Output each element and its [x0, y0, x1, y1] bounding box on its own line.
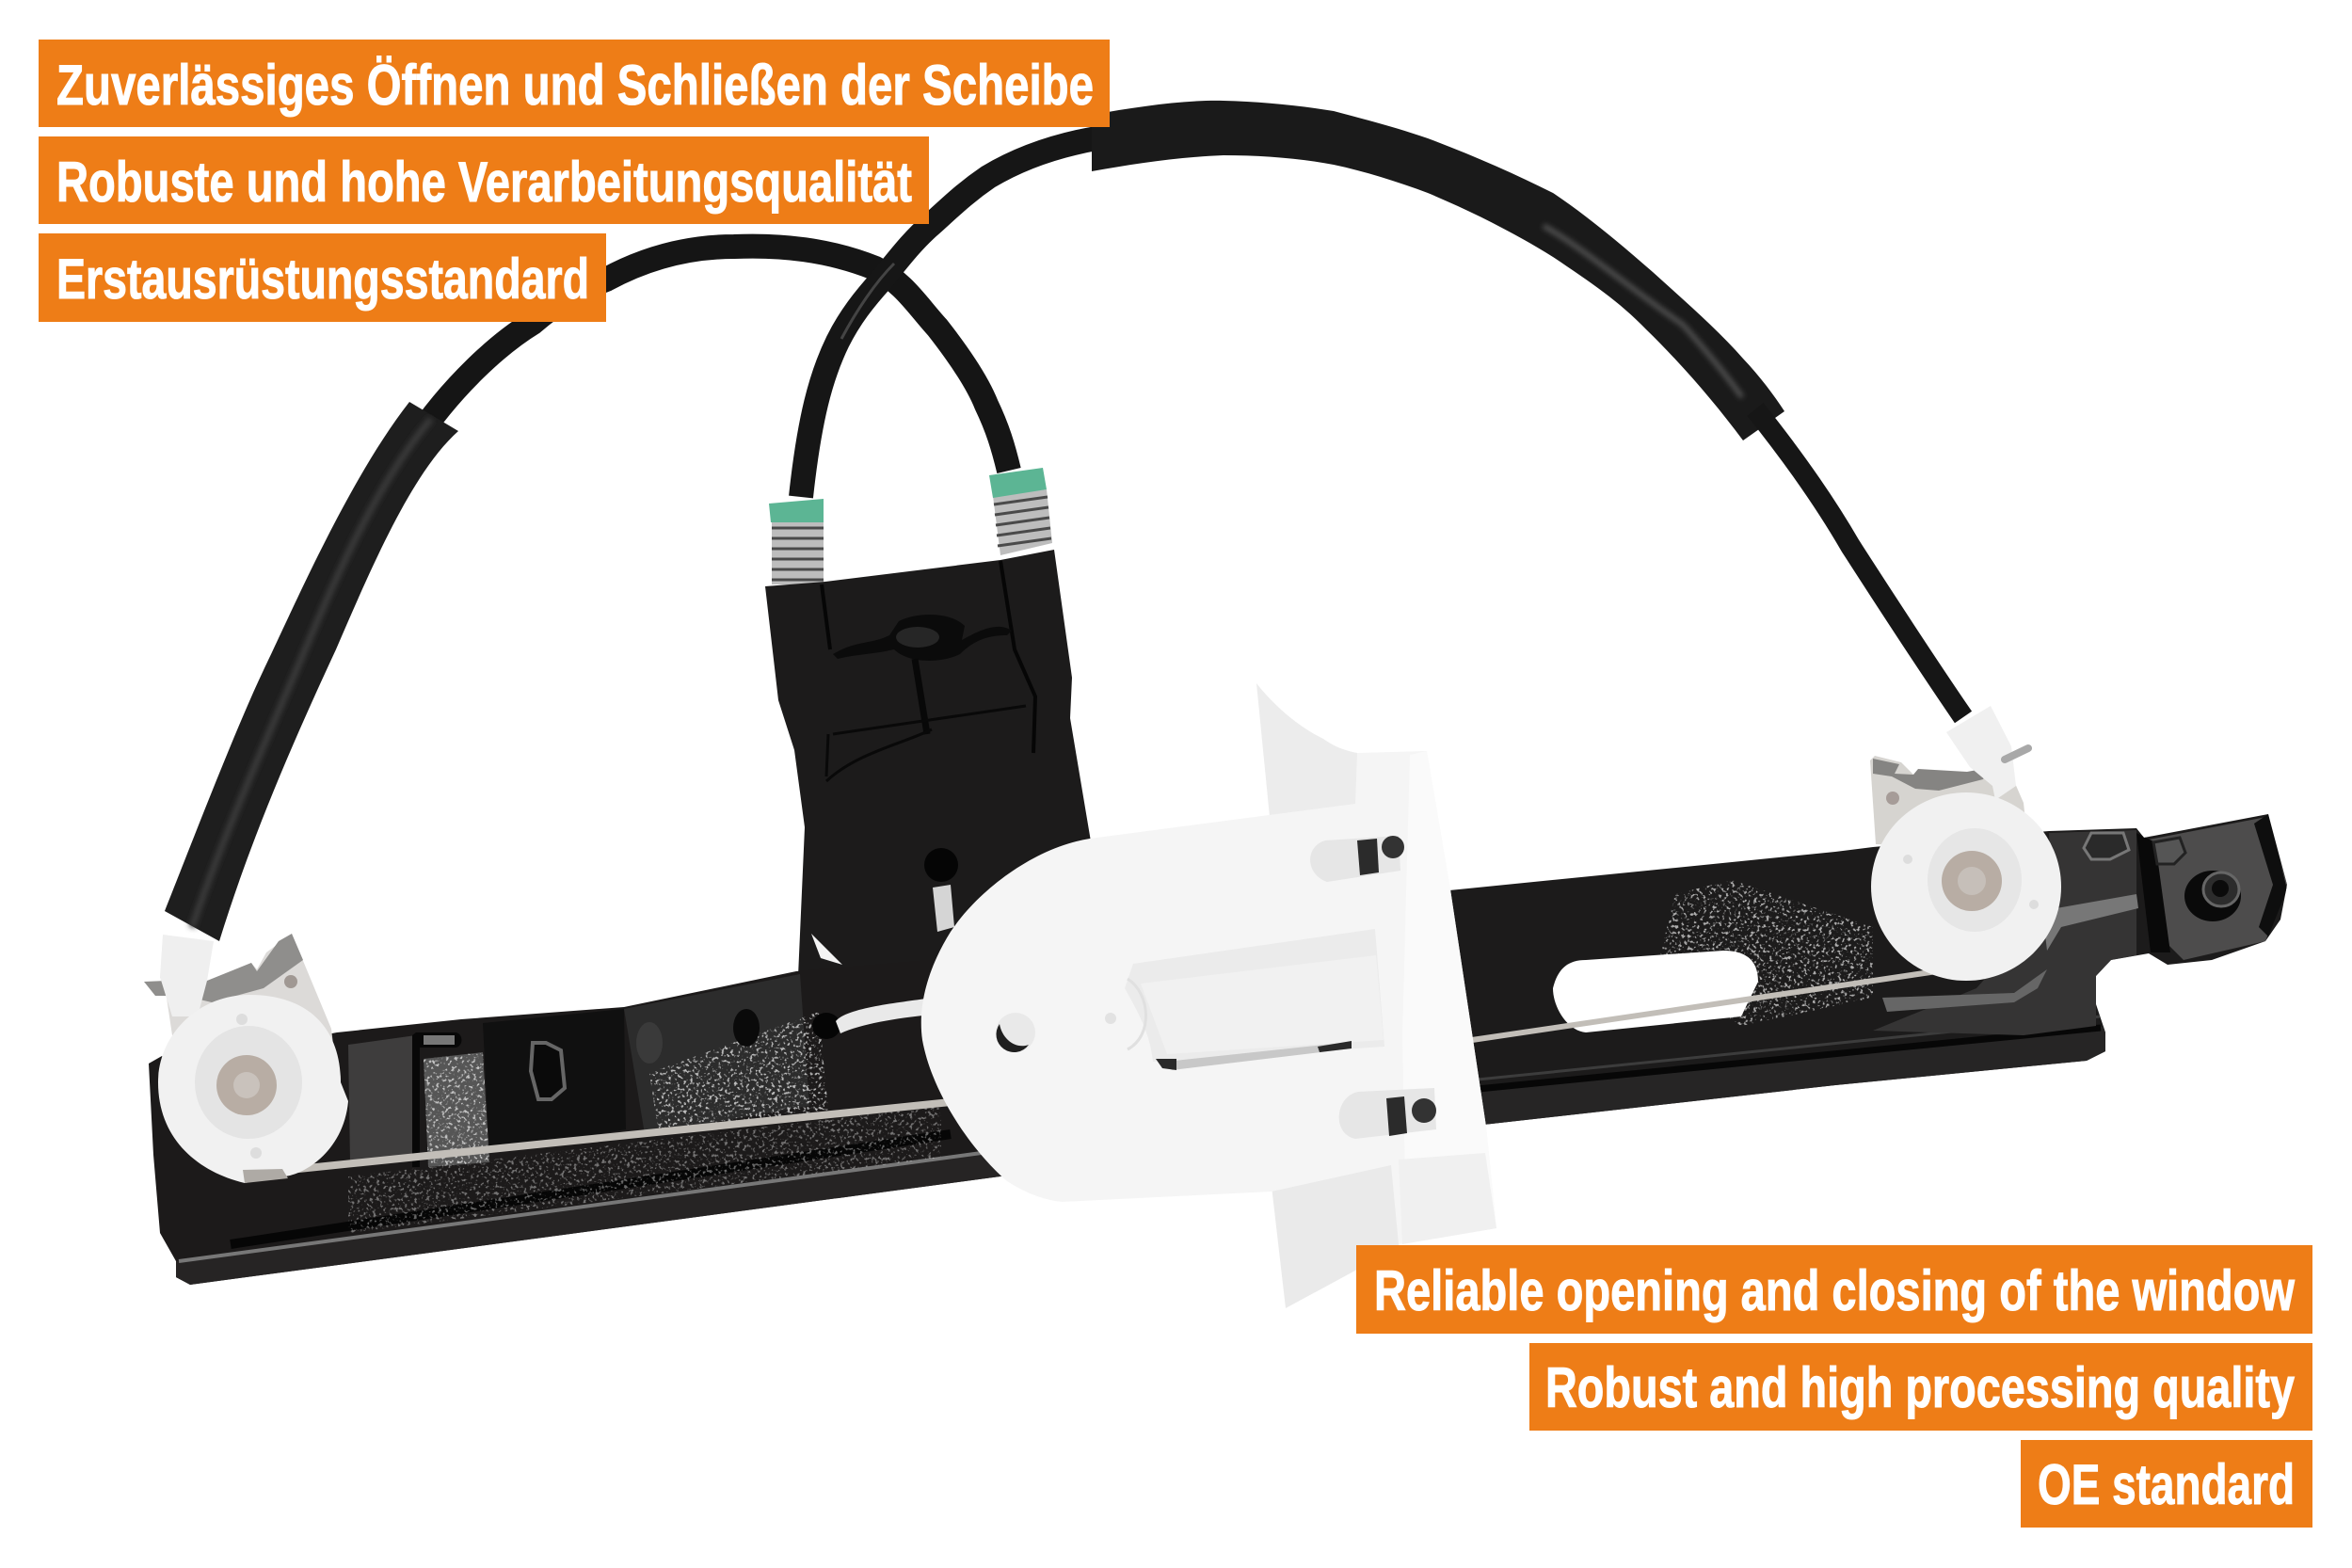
- label: OE standard (DE): Erstausrüstungsstandard: [56, 248, 589, 311]
- carrier body: [921, 751, 1496, 1244]
- label: build quality (DE): [39, 136, 929, 224]
- label: build quality (EN): [1529, 1343, 2312, 1431]
- label: reliable opening (EN): [1356, 1245, 2312, 1334]
- product photo: window regulator: [144, 101, 2287, 1308]
- right pulley: [1871, 792, 2061, 981]
- white plastic carrier: [921, 683, 1496, 1308]
- carrier hole: [996, 1013, 1035, 1052]
- label: OE standard (DE): [39, 233, 606, 322]
- English feature labels: [1356, 1245, 2312, 1528]
- left cable sleeve: [160, 935, 214, 1016]
- lower steel rail, right section: [1440, 814, 2287, 1134]
- left cable: [165, 247, 1009, 941]
- label: reliable opening (DE): [39, 40, 1110, 127]
- cable end fittings: springs: [769, 468, 1052, 584]
- right cable: [801, 101, 1963, 717]
- rail slot: [1553, 951, 1758, 1032]
- right cable sleeve: [1946, 706, 2016, 800]
- black plastic guide plate: [765, 550, 1092, 998]
- German feature labels: [39, 40, 1110, 322]
- left pulley bracket: [144, 934, 339, 1092]
- carrier pivot: [1128, 979, 1146, 1049]
- carrier screw slots: [1310, 836, 1400, 882]
- label: reliable opening (DE): Zuverlässiges Öffnen und Schließen der Scheibe: [56, 54, 1094, 117]
- label: build quality (DE): Robuste und hohe Verarbeitungsqualität: [56, 151, 912, 214]
- lower fin: [1272, 1158, 1412, 1308]
- left pulley: [158, 995, 348, 1183]
- steel cables: [289, 968, 1962, 1170]
- carrier recess: [1125, 929, 1384, 1062]
- label: OE standard (EN): [2021, 1440, 2312, 1528]
- lower steel rail, left section: [149, 971, 1001, 1285]
- right pulley bracket: [1870, 706, 2028, 847]
- upper fin: [1256, 683, 1357, 817]
